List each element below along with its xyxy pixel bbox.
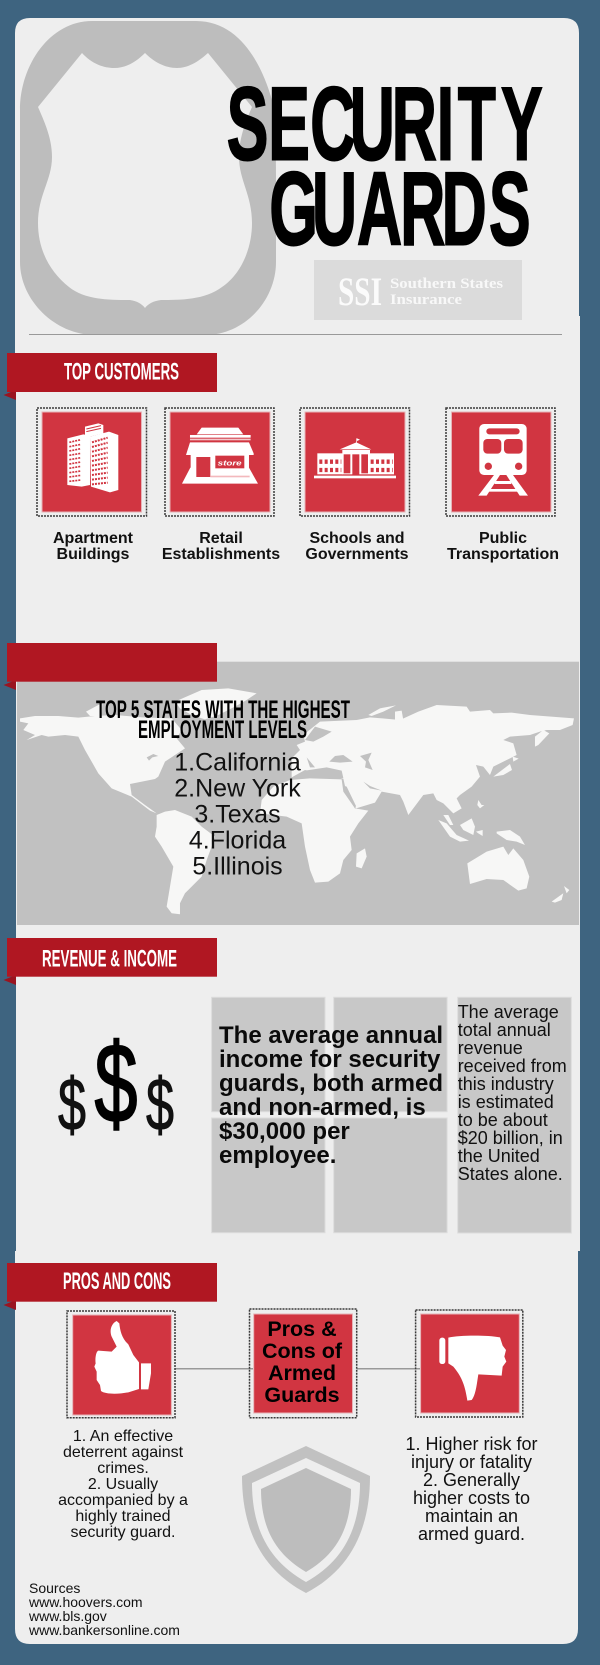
panel: world map bbox=[17, 662, 579, 925]
text: average annual income: guards, both armed bbox=[219, 1070, 443, 1097]
ribbon: empty section banner bbox=[4, 643, 217, 690]
label: public transportation: Public bbox=[479, 530, 527, 547]
icon: dollar signs: $ bbox=[58, 1063, 86, 1146]
map: americas bbox=[20, 688, 257, 914]
card: pros and cons of armed guards: Guards bbox=[264, 1383, 340, 1407]
text: sources: Sources bbox=[29, 1580, 80, 1596]
label: schools and governments: Governments bbox=[305, 546, 409, 563]
text: total annual revenue: the United bbox=[458, 1146, 540, 1166]
text: total annual revenue: $20 billion, in bbox=[458, 1128, 563, 1148]
card: pros and cons of armed guards: Cons of bbox=[262, 1339, 343, 1363]
card: apartment buildings icon bbox=[37, 408, 146, 516]
icon: police badge outline bbox=[20, 21, 276, 335]
list: top 5 states: 5.Illinois bbox=[192, 852, 283, 880]
text: cons list: armed guard. bbox=[418, 1524, 525, 1544]
panel: revenue tile bbox=[458, 997, 571, 1233]
card: retail store icon bbox=[165, 408, 274, 516]
text: cons list: maintain an bbox=[425, 1506, 518, 1526]
label: apartment buildings: Buildings bbox=[57, 546, 130, 563]
logo: Southern States Insurance: Insurance bbox=[390, 292, 463, 308]
text: average annual income: and non-armed, is bbox=[219, 1094, 426, 1121]
logo: Southern States Insurance bbox=[314, 260, 522, 320]
text: cons list: 2. Generally bbox=[423, 1470, 520, 1490]
heading: top 5 states bbox=[96, 696, 350, 744]
ribbon: top customers bbox=[4, 353, 217, 400]
icon: dollar signs: $ bbox=[94, 1021, 138, 1146]
text: pros list: deterrent against bbox=[63, 1444, 184, 1461]
map: europe, africa, asia, oceania bbox=[260, 705, 574, 903]
text: pros list: crimes. bbox=[97, 1460, 149, 1477]
card: pros and cons of armed guards: Pros & bbox=[267, 1317, 337, 1341]
text: average annual income: The average annual bbox=[219, 1022, 443, 1049]
label: apartment buildings: Apartment bbox=[53, 530, 134, 547]
text: cons list: 1. Higher risk for bbox=[405, 1434, 538, 1454]
card: pros and cons of armed guards: Armed bbox=[268, 1361, 336, 1385]
ribbon: top customers: TOP CUSTOMERS bbox=[64, 358, 179, 385]
text: sources: www.bankersonline.com bbox=[28, 1622, 180, 1638]
list: top 5 states: 1.California bbox=[174, 748, 301, 776]
card: pros and cons of armed guards bbox=[250, 1309, 357, 1418]
text: sources: www.bls.gov bbox=[28, 1608, 107, 1624]
text: cons list: injury or fatality bbox=[411, 1452, 532, 1472]
panel: top customers bbox=[37, 408, 559, 563]
card: thumbs up icon bbox=[67, 1311, 175, 1418]
card: train icon bbox=[446, 408, 555, 516]
text: pros list: 1. An effective bbox=[73, 1428, 173, 1445]
title: GUARDS bbox=[269, 151, 531, 268]
text: total annual revenue: this industry bbox=[458, 1074, 554, 1094]
text: pros list: 2. Usually bbox=[88, 1476, 158, 1493]
ribbon: pros and cons bbox=[4, 1263, 217, 1310]
icon: dollar signs bbox=[58, 1021, 174, 1146]
text: average annual income: employee. bbox=[219, 1142, 336, 1169]
card: retail store icon: store bbox=[218, 458, 242, 467]
connector lines bbox=[175, 1368, 420, 1370]
logo: Southern States Insurance: SSI bbox=[338, 269, 382, 314]
text: total annual revenue: total annual bbox=[458, 1020, 551, 1040]
text: total annual revenue: The average bbox=[458, 1002, 559, 1022]
text: cons list: higher costs to bbox=[413, 1488, 530, 1508]
title: SECURITY bbox=[227, 66, 543, 183]
card: government building icon bbox=[300, 408, 410, 516]
label: schools and governments: Schools and bbox=[309, 530, 405, 547]
text: average annual income: $30,000 per bbox=[219, 1118, 350, 1145]
text: pros list: accompanied by a bbox=[58, 1492, 188, 1509]
list: top 5 states: 2.New York bbox=[174, 774, 301, 802]
text: total annual revenue: received from bbox=[458, 1056, 567, 1076]
icon: dollar signs: $ bbox=[146, 1063, 174, 1146]
text: total annual revenue: is estimated bbox=[458, 1092, 554, 1112]
text: pros list: highly trained bbox=[75, 1508, 171, 1525]
panel: income tile grid bbox=[212, 997, 447, 1233]
heading: top 5 states: EMPLOYMENT LEVELS bbox=[138, 716, 307, 744]
text: total annual revenue: to be about bbox=[458, 1110, 548, 1130]
ribbon: pros and cons: PROS AND CONS bbox=[63, 1268, 171, 1295]
heading: top 5 states: TOP 5 STATES WITH THE HIGHEST bbox=[96, 696, 350, 724]
ribbon: revenue and income: REVENUE & INCOME bbox=[42, 946, 177, 973]
logo: Southern States Insurance: Southern States bbox=[390, 276, 503, 292]
list: top 5 states: 3.Texas bbox=[194, 800, 281, 828]
text: total annual revenue: revenue bbox=[458, 1038, 523, 1058]
text: pros list: security guard. bbox=[71, 1524, 175, 1541]
title bbox=[227, 66, 543, 268]
card: thumbs down icon bbox=[416, 1310, 523, 1417]
icon: shield bbox=[242, 1446, 370, 1593]
label: retail establishments: Establishments bbox=[162, 546, 280, 563]
text: sources: www.hoovers.com bbox=[28, 1594, 143, 1610]
text: average annual income: income for security bbox=[219, 1046, 441, 1073]
text: total annual revenue: States alone. bbox=[458, 1164, 563, 1184]
label: public transportation: Transportation bbox=[447, 546, 559, 563]
ribbon: revenue and income bbox=[4, 938, 217, 985]
label: retail establishments: Retail bbox=[199, 530, 243, 547]
list: top 5 states: 4.Florida bbox=[189, 826, 286, 854]
